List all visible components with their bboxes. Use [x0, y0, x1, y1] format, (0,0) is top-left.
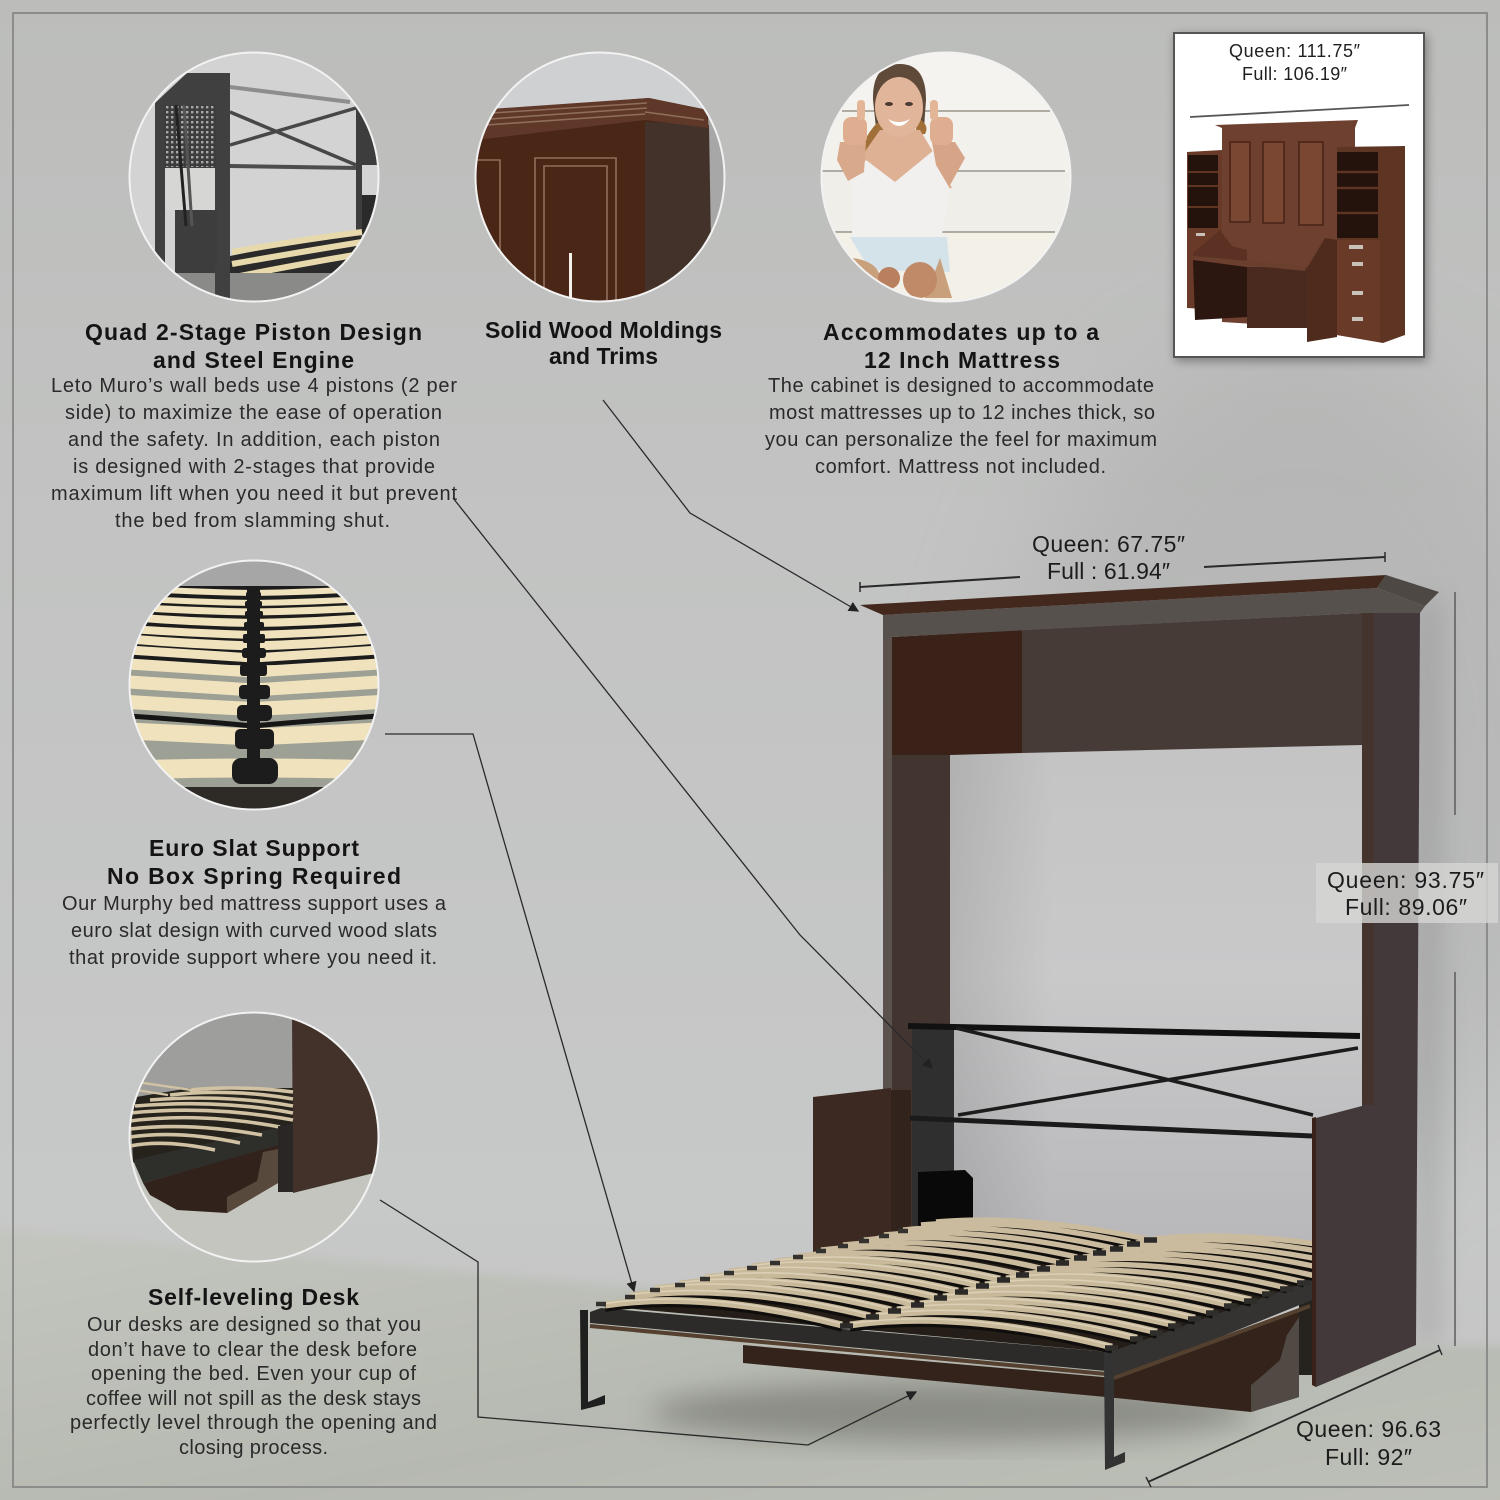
text: moldings [485, 317, 722, 369]
text: moldings: and Trims [549, 343, 658, 369]
heading: euro slat: No Box Spring Required [107, 863, 401, 889]
heading: mattress: Accommodates up to a [823, 319, 1099, 345]
body: mattress: comfort. Mattress not included. [815, 456, 1106, 478]
bed legs [580, 1310, 1125, 1470]
dimension: bed depth [1146, 1345, 1442, 1487]
slat right end blocks [1105, 1283, 1310, 1348]
desk gap behind support [1299, 1300, 1314, 1375]
crown molding [860, 575, 1439, 640]
heading: quad piston: and Steel Engine [153, 347, 354, 373]
bed side rail [1110, 1280, 1312, 1380]
thumbnail: full wall bed unit [1174, 33, 1424, 357]
right post and side panel [1316, 613, 1420, 1387]
dimension: cabinet width: Full : 61.94″ [1047, 558, 1170, 584]
body: euro slat: Our Murphy bed mattress support uses a [62, 893, 447, 915]
body: desk [70, 1314, 437, 1459]
circle: solid wood moldings [470, 53, 726, 305]
heading: euro slat [107, 835, 401, 889]
body: mattress: you can personalize the feel for maximum [765, 429, 1157, 451]
text: desk [70, 1284, 437, 1459]
thumbnail width label: Full: 106.19″ [1242, 64, 1348, 84]
body: quad piston: Leto Muro’s wall beds use 4 pistons (2 per [51, 375, 457, 397]
dimension: cabinet height: Full: 89.06″ [1345, 894, 1467, 920]
circle: euro slats [129, 561, 379, 817]
body: mattress: The cabinet is designed to accommodate [768, 375, 1154, 397]
bed front rail [590, 1308, 1110, 1371]
body: desk: Our desks are designed so that you [87, 1314, 421, 1336]
circle outline 4 [130, 560, 378, 810]
slat center blocks [840, 1240, 1157, 1326]
dimension: cabinet height: Queen: 93.75″ [1327, 867, 1484, 893]
body: quad piston: the bed from slamming shut. [115, 510, 390, 532]
desk under bed [743, 1310, 1299, 1412]
body: euro slat: that provide support where you need it. [69, 947, 437, 969]
text: quad piston [51, 319, 457, 532]
bed base under slats [601, 1222, 1384, 1352]
heading: quad piston [85, 319, 422, 373]
body: quad piston: and the safety. In addition, each piston [68, 429, 440, 451]
heading: desk: Self-leveling Desk [148, 1284, 359, 1310]
circle: woman with mattress [822, 53, 1070, 301]
body: mattress: most mattresses up to 12 inches thick, so [769, 402, 1155, 424]
bed front brown strip [590, 1326, 1106, 1374]
woman figure [837, 64, 965, 298]
right post inner edge [1362, 613, 1374, 1105]
dimension: cabinet width: Queen: 67.75″ [1032, 531, 1185, 557]
circle: self-leveling desk [130, 1013, 378, 1263]
body: desk: coffee will not spill as the desk stays [86, 1388, 421, 1410]
slat left end blocks [596, 1231, 908, 1304]
circle outline 2 [476, 52, 724, 302]
heading: quad piston: Quad 2-Stage Piston Design [85, 319, 422, 345]
circle outline 1 [130, 52, 378, 302]
dimension: bed depth: Full: 92″ [1325, 1444, 1412, 1470]
left desk panel [813, 1088, 891, 1254]
body: quad piston: is designed with 2-stages that provide [73, 456, 435, 478]
body: desk: closing process. [179, 1437, 328, 1459]
text: euro slat [62, 835, 447, 969]
circle outline 3 [822, 52, 1070, 302]
dimension: cabinet width [860, 531, 1385, 592]
circle: piston and steel engine [130, 53, 382, 307]
text: mattress [765, 319, 1157, 478]
thumbnail width label: Queen: 111.75″ [1229, 41, 1361, 61]
metal frame [908, 1025, 1360, 1226]
leader lines [380, 400, 932, 1445]
text: moldings: Solid Wood Moldings [485, 317, 722, 343]
side brown strip [1114, 1306, 1310, 1378]
heading: mattress: 12 Inch Mattress [864, 347, 1060, 373]
dimension: bed depth: Queen: 96.63 [1296, 1416, 1441, 1442]
cabinet upper panel right [1022, 613, 1362, 753]
thumbnail width label [1229, 41, 1361, 84]
slats [596, 1220, 1384, 1350]
body: euro slat: euro slat design with curved wood slats [71, 920, 437, 942]
heading: euro slat: Euro Slat Support [149, 835, 359, 861]
thumbnail dimension line [1190, 105, 1409, 117]
heading: mattress [823, 319, 1099, 373]
body: euro slat [62, 893, 447, 969]
center spine blocks [232, 589, 278, 784]
dimension: cabinet height [1316, 592, 1498, 1346]
body: quad piston [51, 375, 457, 532]
left post outer strip [883, 618, 892, 1240]
cabinet interior back wall [950, 745, 1362, 1260]
body: quad piston: maximum lift when you need it but prevent [51, 483, 457, 505]
circle outline 5 [130, 1012, 378, 1262]
body: mattress [765, 375, 1157, 478]
body: desk: opening the bed. Even your cup of [91, 1363, 416, 1385]
left post [892, 755, 950, 1240]
body: quad piston: side) to maximize the ease of operation [65, 402, 442, 424]
thumbnail furniture [1187, 120, 1405, 343]
body: desk: perfectly level through the opening and [70, 1412, 437, 1434]
desk side support [1251, 1317, 1299, 1412]
cabinet upper panel left [892, 630, 1022, 760]
mattress layers [822, 110, 1065, 233]
right panel inner edge [1312, 1117, 1316, 1387]
body: desk: don’t have to clear the desk before [88, 1339, 417, 1361]
wall bed cabinet [580, 575, 1439, 1470]
post lower section [891, 1090, 911, 1235]
